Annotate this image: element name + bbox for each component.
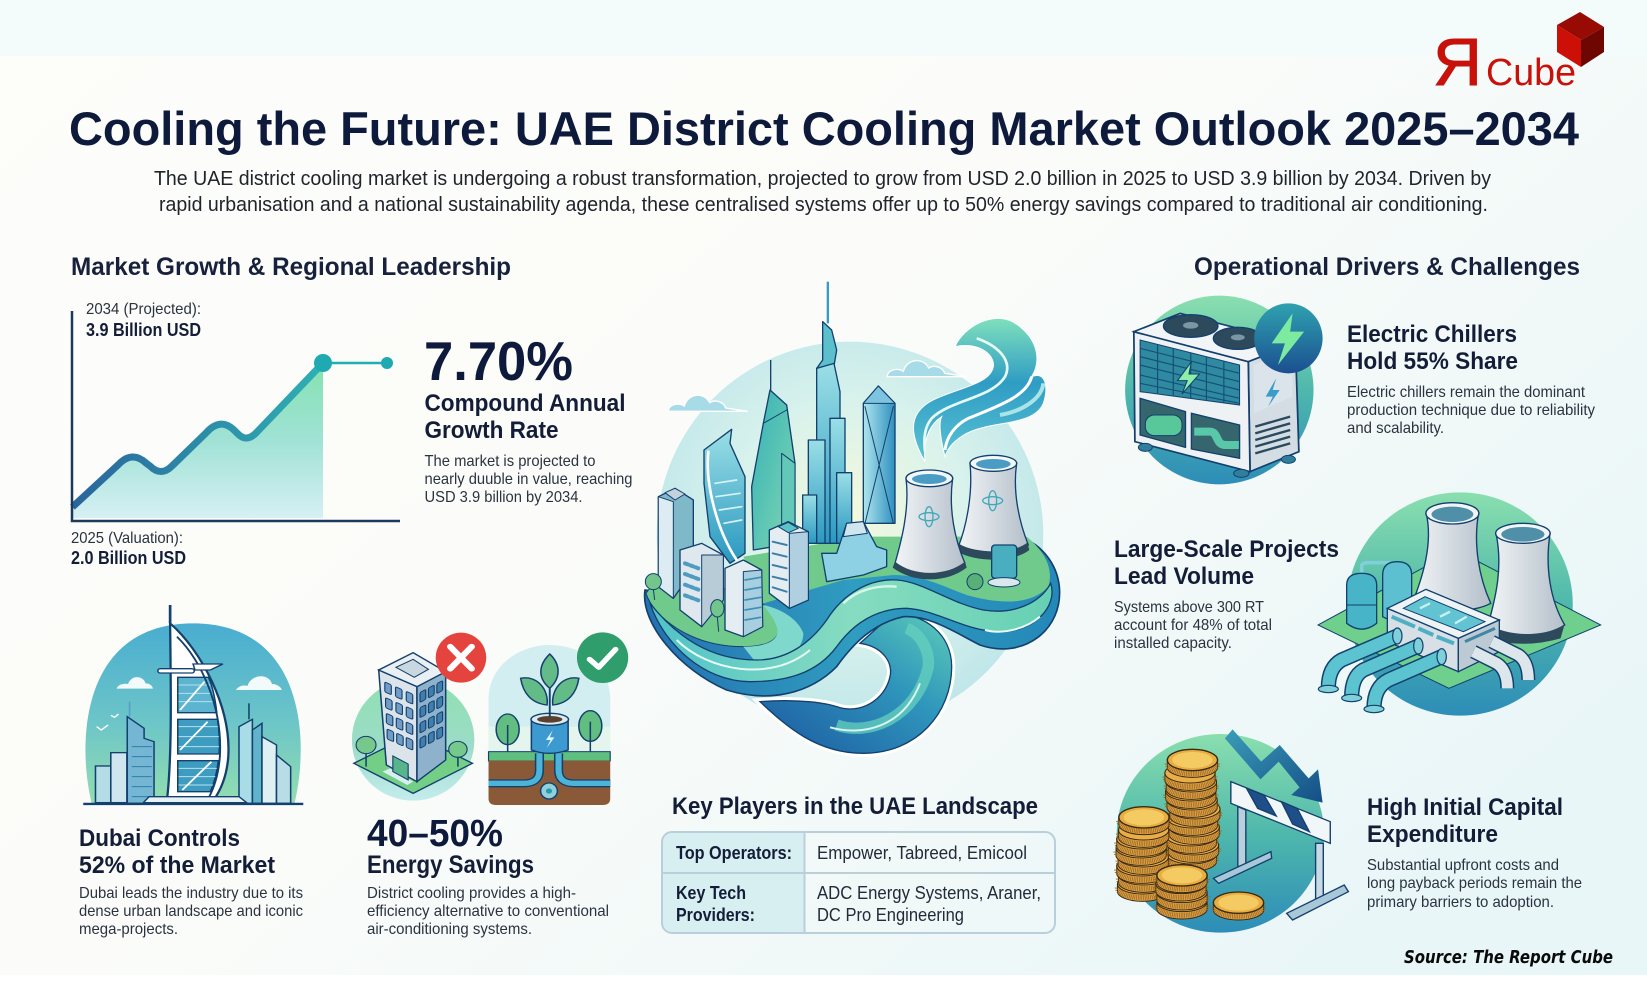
text: large-scale projects: account for 48% of total	[1114, 617, 1272, 634]
logo: RCube	[1433, 12, 1604, 100]
back coin stack	[1165, 749, 1220, 871]
table: ADC Energy Systems, Araner,	[817, 883, 1041, 903]
logo: mirrored R: R	[1433, 25, 1482, 100]
heading: key players: Key Players in the UAE Landscape	[672, 793, 1038, 820]
chart label: 2034: 3.9 Billion USD	[86, 320, 201, 340]
area line chart	[72, 311, 400, 521]
text: Dubai market share: dense urban landscape and iconic	[79, 903, 303, 920]
text: Dubai market share	[79, 825, 303, 938]
text: large-scale projects: installed capacity.	[1114, 635, 1232, 652]
chart label: 2034	[86, 301, 201, 340]
lower swirl	[760, 613, 952, 753]
logo: Cube word: Cube	[1486, 52, 1576, 94]
table: Empower, Tabreed, Emicool	[817, 843, 1027, 863]
skyscrapers	[658, 282, 895, 637]
table: Top Operators:	[676, 843, 792, 863]
icon: red cross badge	[436, 633, 486, 683]
intro paragraph: rapid urbanisation and a national sustainability agenda, these centralised systems offer up to 50% energy savings compared to traditional air conditioning.	[159, 194, 1488, 216]
text: large-scale projects: Lead Volume	[1114, 563, 1254, 590]
stat: CAGR: USD 3.9 billion by 2034.	[424, 489, 582, 506]
text: energy savings: efficiency alternative to conventional	[367, 903, 609, 920]
panel: key players table	[662, 793, 1055, 933]
panel: operational drivers and challenges	[1114, 253, 1601, 933]
chart label: 2025	[71, 530, 186, 568]
central illustration: city on swirling water	[645, 282, 1060, 753]
text: capital expenditure: Substantial upfront costs and	[1367, 857, 1559, 874]
text: energy savings	[367, 813, 609, 938]
text: energy savings: 40–50%	[367, 813, 503, 855]
stat: CAGR: nearly duuble in value, reaching	[424, 471, 632, 488]
chart label: 2025: 2.0 Billion USD	[71, 548, 186, 568]
icon: conventional building with red cross	[352, 633, 486, 801]
chart label: 2025: 2025 (Valuation):	[71, 530, 183, 547]
text: electric chillers: Electric chillers remain the dominant	[1347, 384, 1586, 401]
text: capital expenditure: High Initial Capital	[1367, 794, 1563, 821]
text: energy savings: air-conditioning systems.	[367, 921, 532, 938]
text: Dubai market share: mega-projects.	[79, 921, 178, 938]
icon: green check badge	[577, 632, 628, 683]
text: large-scale projects	[1114, 536, 1339, 652]
falling arrow	[1225, 729, 1323, 803]
heading: operational drivers: Operational Drivers & Challenges	[1194, 253, 1580, 281]
single coin	[1213, 892, 1264, 920]
front coin stack	[1156, 865, 1207, 919]
text: electric chillers: and scalability.	[1347, 420, 1444, 437]
stat: CAGR	[424, 330, 632, 506]
panel: market growth and regional leadership	[71, 253, 632, 938]
icon: Dubai skyline	[83, 605, 303, 804]
intro paragraph	[154, 168, 1491, 216]
title: Cooling the Future: UAE District Cooling Market Outlook 2025–2034	[69, 103, 1580, 156]
trees	[645, 574, 724, 632]
table: Providers:	[676, 905, 755, 925]
stat: CAGR: Growth Rate	[424, 417, 558, 444]
icon: district cooling with green check	[489, 632, 628, 805]
barrier	[1213, 782, 1348, 920]
text: electric chillers: production technique due to reliability	[1347, 402, 1595, 419]
chart label: 2034: 2034 (Projected):	[86, 301, 201, 318]
logo: red cube	[1557, 12, 1604, 67]
text: large-scale projects: Large-Scale Projects	[1114, 536, 1339, 563]
stat: CAGR: 7.70%	[424, 330, 573, 392]
text: electric chillers: Electric Chillers	[1347, 321, 1517, 348]
text: electric chillers: Hold 55% Share	[1347, 348, 1518, 375]
table: DC Pro Engineering	[817, 905, 964, 925]
table: Key Tech	[676, 883, 746, 903]
stat: CAGR: Compound Annual	[424, 390, 626, 417]
text: Dubai market share: 52% of the Market	[79, 852, 275, 879]
text: capital expenditure	[1367, 794, 1582, 911]
icon: lightning badge	[1254, 303, 1323, 373]
icon: electric chiller	[1125, 296, 1323, 484]
text: Dubai market share: Dubai leads the industry due to its	[79, 885, 303, 902]
icon: coins, barrier and falling arrow	[1116, 729, 1348, 933]
stat: CAGR: The market is projected to	[424, 453, 596, 470]
text: energy savings: Energy Savings	[367, 851, 534, 879]
text: electric chillers	[1347, 321, 1595, 437]
intro paragraph: The UAE district cooling market is undergoing a robust transformation, projected to grow from USD 2.0 billion in 2025 to USD 3.9 billion by 2034. Driven by	[154, 168, 1491, 190]
smoke plume	[913, 318, 1046, 462]
island base	[645, 540, 1060, 696]
left coin stack	[1116, 807, 1169, 901]
icon: central cooling plant	[1318, 492, 1601, 716]
table	[662, 832, 1055, 933]
text: capital expenditure: Expenditure	[1367, 821, 1498, 848]
text: capital expenditure: long payback periods remain the	[1367, 875, 1582, 892]
text: Dubai market share: Dubai Controls	[79, 825, 240, 852]
text: large-scale projects: Systems above 300 RT	[1114, 599, 1264, 616]
heading: market growth: Market Growth & Regional Leadership	[71, 253, 511, 281]
main water band	[650, 580, 1052, 682]
text: energy savings: District cooling provides a high-	[367, 885, 576, 902]
text: capital expenditure: primary barriers to adoption.	[1367, 894, 1554, 911]
cooling towers	[893, 455, 1029, 590]
